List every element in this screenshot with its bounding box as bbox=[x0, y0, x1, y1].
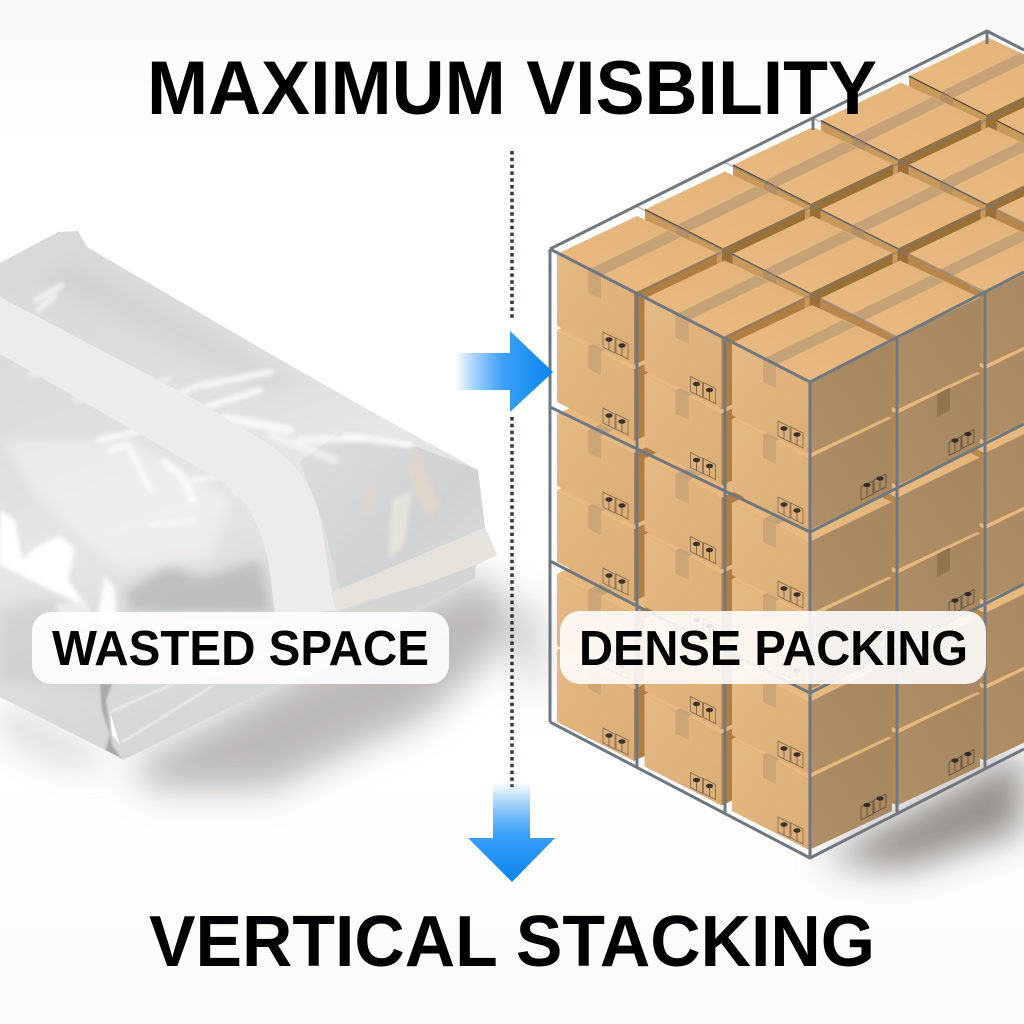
column: centre right bbox=[820, 260, 980, 806]
box stack bbox=[557, 38, 1024, 850]
illustration: plastic bag bbox=[0, 231, 497, 760]
bag: end gusset bbox=[300, 432, 485, 590]
floor shadow: stack bbox=[505, 590, 1024, 870]
column: front corner bbox=[732, 305, 892, 850]
bag: shaded folds and gloss bbox=[0, 262, 497, 758]
bag: white tape band bbox=[0, 297, 336, 616]
dotted centre divider bbox=[510, 151, 514, 787]
column: middle left bbox=[644, 260, 804, 806]
bag: bright left highlights bbox=[0, 511, 117, 612]
label pill: wasted space: WASTED SPACE bbox=[52, 622, 429, 676]
bag: white inner pleat bbox=[110, 712, 120, 745]
blue arrow: down bbox=[468, 783, 555, 882]
bag: lower crease lines bbox=[110, 684, 213, 742]
blue arrow: right bbox=[455, 331, 553, 412]
column: right bbox=[908, 216, 1024, 761]
frame: tier rails bbox=[550, 407, 1024, 858]
bag: broad sheen on front bbox=[12, 444, 218, 562]
label pill: wasted space bbox=[32, 612, 449, 684]
bag: lower dark lumps bbox=[0, 558, 274, 687]
frame: top grid seams bbox=[636, 101, 1024, 338]
column: far left bbox=[557, 216, 717, 761]
frame: top rim bbox=[550, 31, 1024, 382]
glass frame around stack bbox=[550, 31, 1024, 858]
label pill: dense packing: DENSE PACKING bbox=[579, 622, 968, 676]
bag: lower seam pleat bbox=[100, 684, 121, 758]
frame: posts bbox=[550, 31, 987, 858]
bag: silhouette body bbox=[0, 231, 497, 760]
back row box tops bbox=[645, 38, 1024, 365]
bag: gloss streaks bbox=[30, 285, 410, 525]
bottom heading: VERTICAL STACKING bbox=[149, 902, 875, 982]
column: far right bbox=[996, 172, 1024, 716]
floor shadow: bag bbox=[0, 572, 525, 790]
bag: lower layer under flap bbox=[340, 560, 475, 648]
title: MAXIMUM VISBILITY bbox=[147, 46, 877, 131]
bag: tan creases bbox=[364, 452, 439, 558]
bag: end flap strip bbox=[333, 527, 497, 612]
